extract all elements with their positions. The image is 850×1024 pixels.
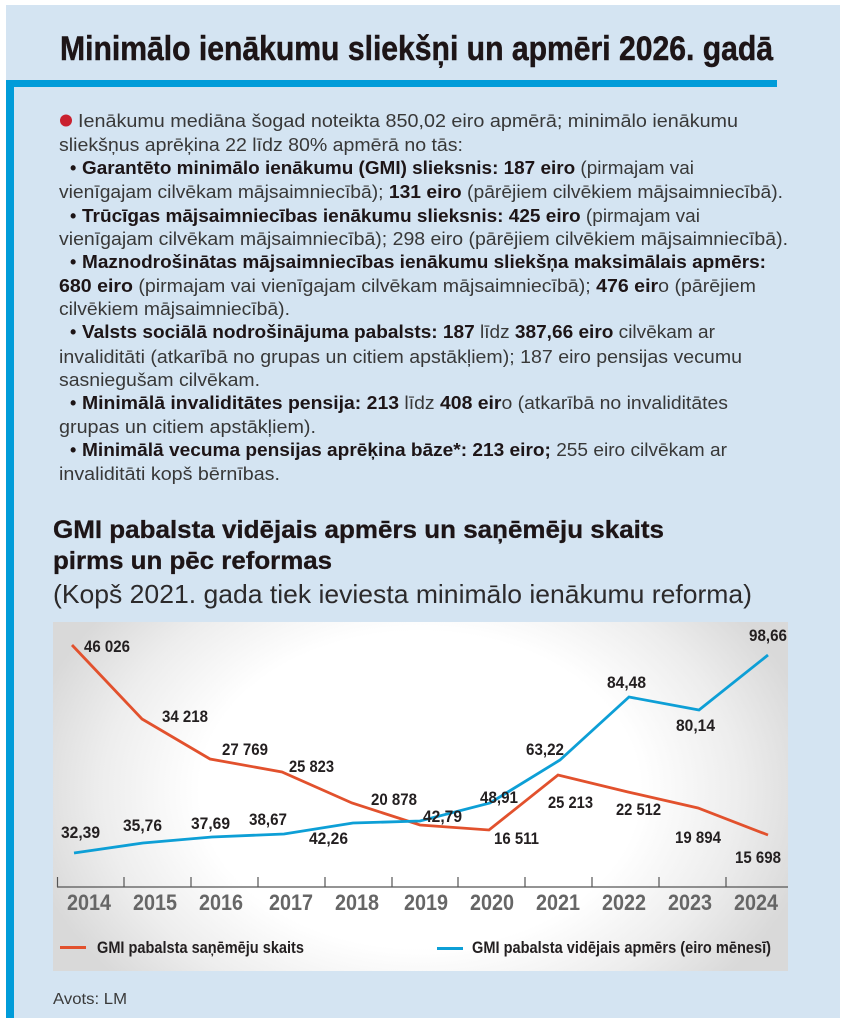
- recipient value labels: 16 511: [494, 829, 539, 848]
- item: minimum old-age pension base: Minimālā vecuma pensijas aprēķina bāze*: 213 eiro; 255 eiro cilvēkam ar: [82, 440, 727, 460]
- item: GMI threshold: [59, 158, 783, 202]
- intro paragraph: Ienākumu mediāna šogad noteikta 850,02 eiro apmērā; minimālo ienākumu: [78, 111, 738, 131]
- text block: income thresholds: [59, 111, 788, 484]
- line chart: [53, 622, 788, 971]
- recipient value labels: 15 698: [735, 848, 781, 867]
- chart heading: [53, 516, 752, 609]
- item: minimum old-age pension base: [59, 440, 727, 484]
- recipient value labels: 25 213: [548, 793, 593, 812]
- chart heading: GMI pabalsta vidējais apmērs un saņēmēju skaits: [53, 516, 664, 544]
- year labels: 2017: [269, 890, 313, 915]
- year labels: 2021: [536, 890, 580, 915]
- recipient value labels: 20 878: [371, 790, 417, 809]
- item: GMI threshold: vienīgajam cilvēkam mājsaimniecībā); 131 eiro (pārējiem cilvēkiem mājsaimniecībā).: [59, 182, 783, 202]
- item: state social benefit: sasniegušam cilvēkam.: [59, 370, 260, 390]
- recipient value labels: 34 218: [162, 707, 208, 726]
- benefit value labels: 38,67: [249, 810, 287, 829]
- year labels: 2018: [335, 890, 379, 915]
- source: Avots: LM: [53, 991, 127, 1008]
- benefit value labels: 80,14: [676, 716, 715, 735]
- item: low-income threshold: cilvēkiem mājsaimniecībā).: [59, 299, 290, 319]
- year labels: [67, 890, 779, 915]
- year labels: 2014: [67, 890, 112, 915]
- item: low-income threshold: 680 eiro (pirmajam vai vienīgajam cilvēkam mājsaimniecībā); 476 eir o (pārējiem: [59, 276, 756, 296]
- item: minimum old-age pension base: invaliditāti kopš bērnības.: [59, 464, 280, 484]
- recipient value labels: 46 026: [84, 637, 130, 656]
- benefit value labels: 42,79: [423, 807, 462, 826]
- item: minimum disability pension: grupas un citiem apstākļiem).: [59, 417, 316, 437]
- recipient value labels: 19 894: [675, 828, 721, 847]
- recipient value labels: 27 769: [222, 740, 268, 759]
- red line: recipients: [72, 645, 768, 835]
- item: minimum old-age pension base: •: [70, 440, 76, 460]
- year labels: 2024: [734, 890, 779, 915]
- recipient value labels: [84, 637, 781, 867]
- benefit value labels: 35,76: [123, 816, 162, 835]
- item: state social benefit: Valsts sociālā nodrošinājuma pabalsts: 187 līdz 387,66 eiro cilvēkam ar: [82, 322, 715, 342]
- item: poverty threshold: vienīgajam cilvēkam mājsaimniecībā); 298 eiro (pārējiem cilvēkiem mājsaimniecībā).: [59, 229, 788, 249]
- item: low-income threshold: Maznodrošinātas mājsaimniecības ienākumu sliekšņa maksimālais apmērs:: [82, 252, 766, 272]
- item: low-income threshold: •: [70, 252, 76, 272]
- year labels: 2023: [668, 890, 712, 915]
- item: poverty threshold: Trūcīgas mājsaimniecības ienākumu slieksnis: 425 eiro (pirmajam vai: [82, 206, 700, 226]
- intro paragraph: [59, 111, 738, 155]
- blue line: average benefit: [74, 655, 768, 853]
- item: GMI threshold: Garantēto minimālo ienākumu (GMI) slieksnis: 187 eiro (pirmajam vai: [82, 158, 694, 178]
- intro paragraph: sliekšņus aprēķina 22 līdz 80% apmērā no tās:: [59, 135, 463, 155]
- benefit value labels: 42,26: [309, 829, 348, 848]
- item: state social benefit: invaliditāti (atkarībā no grupas un citiem apstākļiem); 187 eiro pensijas vecumu: [59, 347, 742, 367]
- year labels: 2019: [404, 890, 448, 915]
- item: poverty threshold: •: [70, 206, 76, 226]
- chart heading: pirms un pēc reformas: [53, 547, 332, 575]
- item: minimum disability pension: [59, 393, 728, 437]
- benefit value labels: 84,48: [607, 673, 646, 692]
- item: minimum disability pension: Minimālā invaliditātes pensija: 213 līdz 408 eiro (atkarībā no invaliditātes: [82, 393, 728, 413]
- benefit value labels: 48,91: [480, 788, 518, 807]
- item: GMI threshold: •: [70, 158, 76, 178]
- benefit value labels: 63,22: [526, 740, 564, 759]
- x axis: [57, 877, 788, 887]
- benefit value labels: 37,69: [191, 814, 230, 833]
- benefit value labels: 32,39: [61, 823, 100, 842]
- left accent bar: [6, 80, 14, 1018]
- recipient value labels: 22 512: [616, 800, 661, 819]
- item: poverty threshold: [59, 206, 788, 249]
- legend: average benefit: GMI pabalsta vidējais apmērs (eiro mēnesī): [472, 938, 771, 957]
- item: state social benefit: [59, 322, 742, 390]
- legend: recipients: GMI pabalsta saņēmēju skaits: [97, 938, 304, 957]
- benefit value labels: [61, 626, 787, 848]
- year labels: 2020: [470, 890, 514, 915]
- item: low-income threshold: [59, 252, 766, 319]
- benefit value labels: 98,66: [749, 626, 787, 645]
- icon: red bullet: [60, 114, 72, 126]
- item: state social benefit: •: [70, 322, 76, 342]
- top accent bar: [6, 80, 777, 87]
- chart background: [53, 622, 788, 971]
- chart heading: (Kopš 2021. gada tiek ieviesta minimālo ienākumu reforma): [53, 579, 752, 609]
- item: minimum disability pension: •: [70, 393, 76, 413]
- year labels: 2015: [133, 890, 177, 915]
- title: Minimālo ienākumu sliekšņi un apmēri 2026. gadā: [60, 30, 774, 68]
- year labels: 2016: [199, 890, 243, 915]
- recipient value labels: 25 823: [289, 757, 334, 776]
- year labels: 2022: [602, 890, 646, 915]
